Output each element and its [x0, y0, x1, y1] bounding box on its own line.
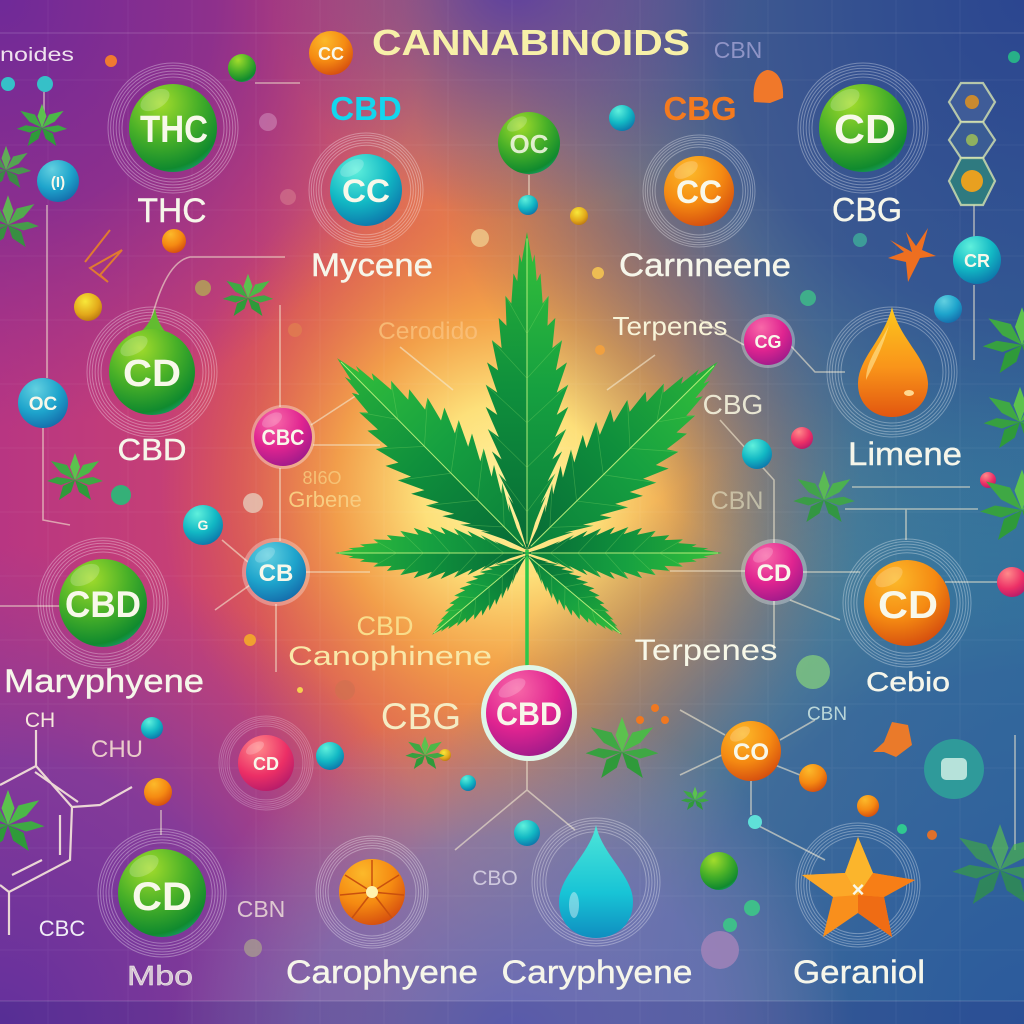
label: CBG: CBG [832, 191, 902, 228]
node: THC: THC [140, 109, 208, 151]
small satellite nodes: OC [29, 394, 58, 415]
label: Carnneene: Carnneene [619, 247, 791, 283]
icon: orange flower lower [873, 722, 912, 757]
small decor blobs [85, 113, 867, 969]
node: CD top right [798, 63, 928, 193]
node: CC teal: CC [342, 173, 390, 209]
text: CBN bottom: CBN [237, 896, 285, 922]
label: Carophyene: Carophyene [286, 954, 478, 990]
node: CG magenta upper right [741, 314, 795, 368]
icon: orange star flower: × [852, 877, 864, 902]
node: CBC magenta [251, 405, 315, 469]
node: CD green left: CD [123, 353, 181, 395]
small satellite nodes: (I) [51, 174, 65, 191]
label: Geraniol: Geraniol [793, 954, 925, 990]
node: CD magenta right: CD [757, 560, 791, 587]
node: OC green [498, 112, 560, 174]
heading: CBG: CBG [663, 90, 737, 127]
icon: blue drop [532, 818, 660, 946]
small satellite nodes: CC [318, 44, 344, 64]
label: Cebio: Cebio [866, 667, 950, 697]
label: Mbo: Mbo [127, 960, 193, 991]
node: CBD green lower left [38, 538, 168, 668]
node: CO orange: CO [733, 739, 769, 766]
connector lines [0, 83, 1015, 860]
label: Limene: Limene [848, 436, 962, 472]
plants [0, 104, 1024, 904]
icon: orange star flower [796, 823, 920, 947]
node: CD pink [219, 716, 313, 810]
central cannabis leaf [307, 232, 748, 668]
text: Grbene: Grbene [288, 487, 362, 512]
node: CBC magenta: CBC [262, 425, 305, 450]
title: CANNABINOIDS [372, 22, 690, 63]
label: THC: THC [138, 192, 206, 230]
text: CBG center: CBG [381, 696, 461, 737]
node: CD magenta right [741, 539, 807, 605]
text: CBD center: CBD [356, 611, 414, 641]
node: CO orange [721, 721, 781, 781]
text: CBG right: CBG [703, 389, 763, 420]
node: CD top right: CD [834, 106, 896, 152]
node: CD green left [87, 307, 217, 437]
text: Terpenes lower: Terpenes [634, 634, 778, 667]
node: CD orange right: CD [878, 584, 938, 627]
icon: orange flower [888, 228, 936, 282]
node: CD green bottom: CD [132, 875, 192, 919]
text: CH: CH [25, 709, 55, 732]
text: Canophinene: Canophinene [288, 641, 492, 671]
node: CBD magenta center: CBD [496, 696, 562, 732]
node: CG magenta upper right: CG [754, 332, 782, 352]
small satellite nodes: CR [964, 251, 990, 271]
text: CBN mid right: CBN [807, 704, 847, 725]
heading: CBN faint: CBN [714, 37, 762, 63]
node: CBD green lower left: CBD [65, 584, 141, 625]
text: Terpenes upper: Terpenes [612, 311, 728, 341]
small satellite nodes: G [198, 517, 209, 533]
hexagon chain top right [949, 83, 995, 205]
text: CBC: CBC [39, 916, 85, 941]
label: Maryphyene: Maryphyene [4, 663, 204, 699]
text: CBO: CBO [472, 867, 518, 890]
node: CC orange: CC [676, 174, 722, 210]
icon: teal badge [924, 739, 984, 799]
node: CD orange right [843, 539, 971, 667]
node: CD pink: CD [253, 754, 279, 774]
icon: orange drop [827, 307, 957, 437]
molecule diagram [0, 730, 132, 935]
node: CC orange [643, 135, 755, 247]
icon: orange splash top [754, 70, 783, 103]
label: Caryphyene: Caryphyene [502, 954, 692, 990]
heading: CBD: CBD [330, 90, 402, 127]
node: CC teal [309, 133, 423, 247]
corner label: noides [0, 45, 74, 66]
label: CBD left: CBD [118, 432, 186, 467]
node: CB blue: CB [259, 560, 293, 587]
text: CBN right: CBN [711, 487, 763, 515]
text: small 860: 8I6O [302, 468, 342, 488]
label: Mycene: Mycene [311, 247, 433, 283]
node: CBD magenta center [481, 665, 577, 761]
text: CHU: CHU [91, 736, 143, 763]
node: CB blue [242, 538, 310, 606]
node: OC green: OC [510, 129, 549, 159]
node: CD green bottom [98, 829, 226, 957]
text: Cerodido: Cerodido [378, 318, 478, 345]
node: THC [108, 63, 238, 193]
icon: orange fruit [316, 836, 428, 948]
